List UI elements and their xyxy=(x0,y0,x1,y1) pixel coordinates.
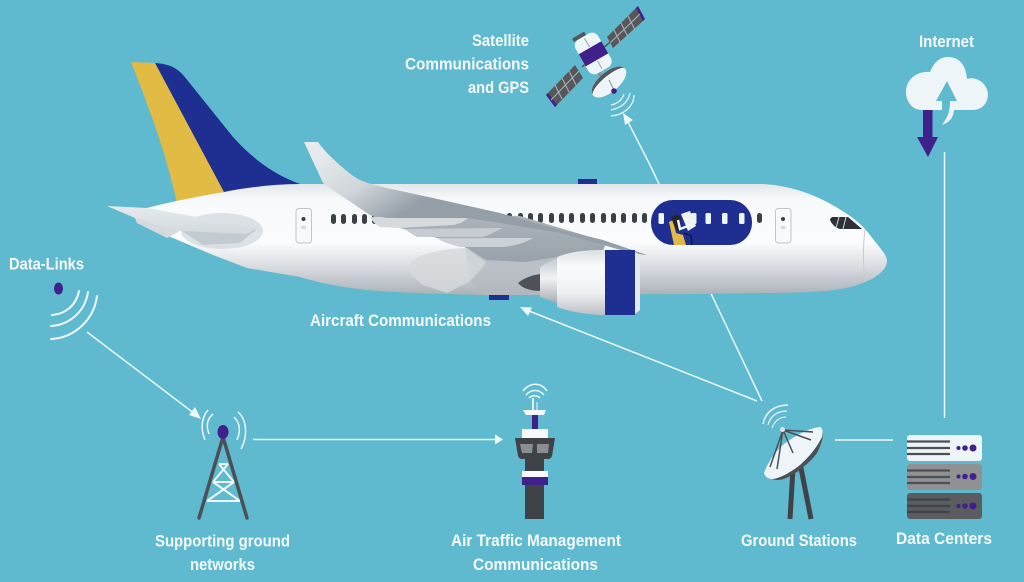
engine cone xyxy=(540,258,557,303)
icon: supporting ground network tower xyxy=(199,410,247,518)
satellite dish mount xyxy=(598,72,606,82)
horizontal stabilizer xyxy=(107,206,257,234)
label: air traffic management communications: Communications xyxy=(473,556,598,574)
newspaper xyxy=(681,211,696,231)
flap 1 xyxy=(370,217,467,228)
engine exhaust xyxy=(518,274,541,291)
icon: data-links signal xyxy=(51,282,97,339)
label: air traffic management communications: Air Traffic Management xyxy=(451,532,621,550)
label: satellite communications and GPS: and GPS xyxy=(468,79,529,97)
line: data centers to internet xyxy=(944,152,946,418)
wing underside xyxy=(370,215,607,262)
connector arrows xyxy=(87,113,944,444)
label: data-links: Data-Links xyxy=(9,256,84,274)
cutaway window panel with passenger xyxy=(651,200,752,245)
tail fin yellow xyxy=(131,62,224,203)
arrow: data-links to supporting ground networks xyxy=(87,332,201,419)
label: air traffic management communications xyxy=(451,532,621,574)
belly antenna xyxy=(489,295,509,300)
server bottom xyxy=(907,493,982,519)
tail fairing xyxy=(181,213,263,249)
rear door xyxy=(296,208,312,243)
arrow: ground networks to air traffic management xyxy=(253,434,503,444)
engine intake lip xyxy=(635,252,640,314)
label: satellite communications and GPS xyxy=(405,32,529,97)
label: internet: Internet xyxy=(919,33,974,51)
wing root fairing xyxy=(408,248,486,293)
arrow: ground stations to aircraft xyxy=(520,307,757,401)
icon: satellite xyxy=(546,6,645,116)
label: satellite communications and GPS: Satellite xyxy=(472,32,529,50)
cockpit windows xyxy=(830,217,862,229)
tail fin blue xyxy=(155,63,300,196)
front door xyxy=(776,208,791,243)
flap 3 xyxy=(437,238,533,247)
label: supporting ground networks: Supporting ground xyxy=(155,532,290,550)
label: aircraft communications: Aircraft Communications xyxy=(310,312,491,330)
icon: air traffic control tower xyxy=(515,384,555,519)
main wing xyxy=(304,142,647,255)
flap 2 xyxy=(405,228,502,237)
icon: ground station dish xyxy=(763,405,823,519)
stabilizer underside xyxy=(135,218,180,238)
stabilizer shadow xyxy=(182,229,257,245)
engine blue band xyxy=(605,250,635,315)
server top xyxy=(907,435,982,461)
passenger xyxy=(671,214,681,232)
label: ground stations: Ground Stations xyxy=(741,532,857,550)
line: ground stations to data centers xyxy=(835,439,893,441)
roof antenna xyxy=(578,179,597,184)
label: supporting ground networks xyxy=(155,532,290,574)
label: supporting ground networks: networks xyxy=(190,556,255,574)
satellite body xyxy=(570,27,614,77)
airplane xyxy=(107,62,887,315)
solar panel lower xyxy=(546,65,583,107)
arrow: ground stations to satellite xyxy=(623,113,762,401)
fuselage xyxy=(135,184,887,295)
signal waves xyxy=(611,93,634,116)
icon: internet cloud xyxy=(906,57,988,157)
engine nacelle xyxy=(557,250,605,315)
label: data centers: Data Centers xyxy=(896,530,992,548)
label: satellite communications and GPS: Communications xyxy=(405,56,529,74)
nose line xyxy=(864,229,865,282)
purple download arrow xyxy=(917,110,938,157)
solar panel upper xyxy=(607,6,645,48)
satellite dish xyxy=(586,61,632,103)
icon: data center servers xyxy=(907,435,982,519)
passenger seat xyxy=(669,220,686,245)
rear cabin windows xyxy=(331,213,762,224)
server middle xyxy=(907,464,982,490)
belly under wing xyxy=(465,247,560,300)
